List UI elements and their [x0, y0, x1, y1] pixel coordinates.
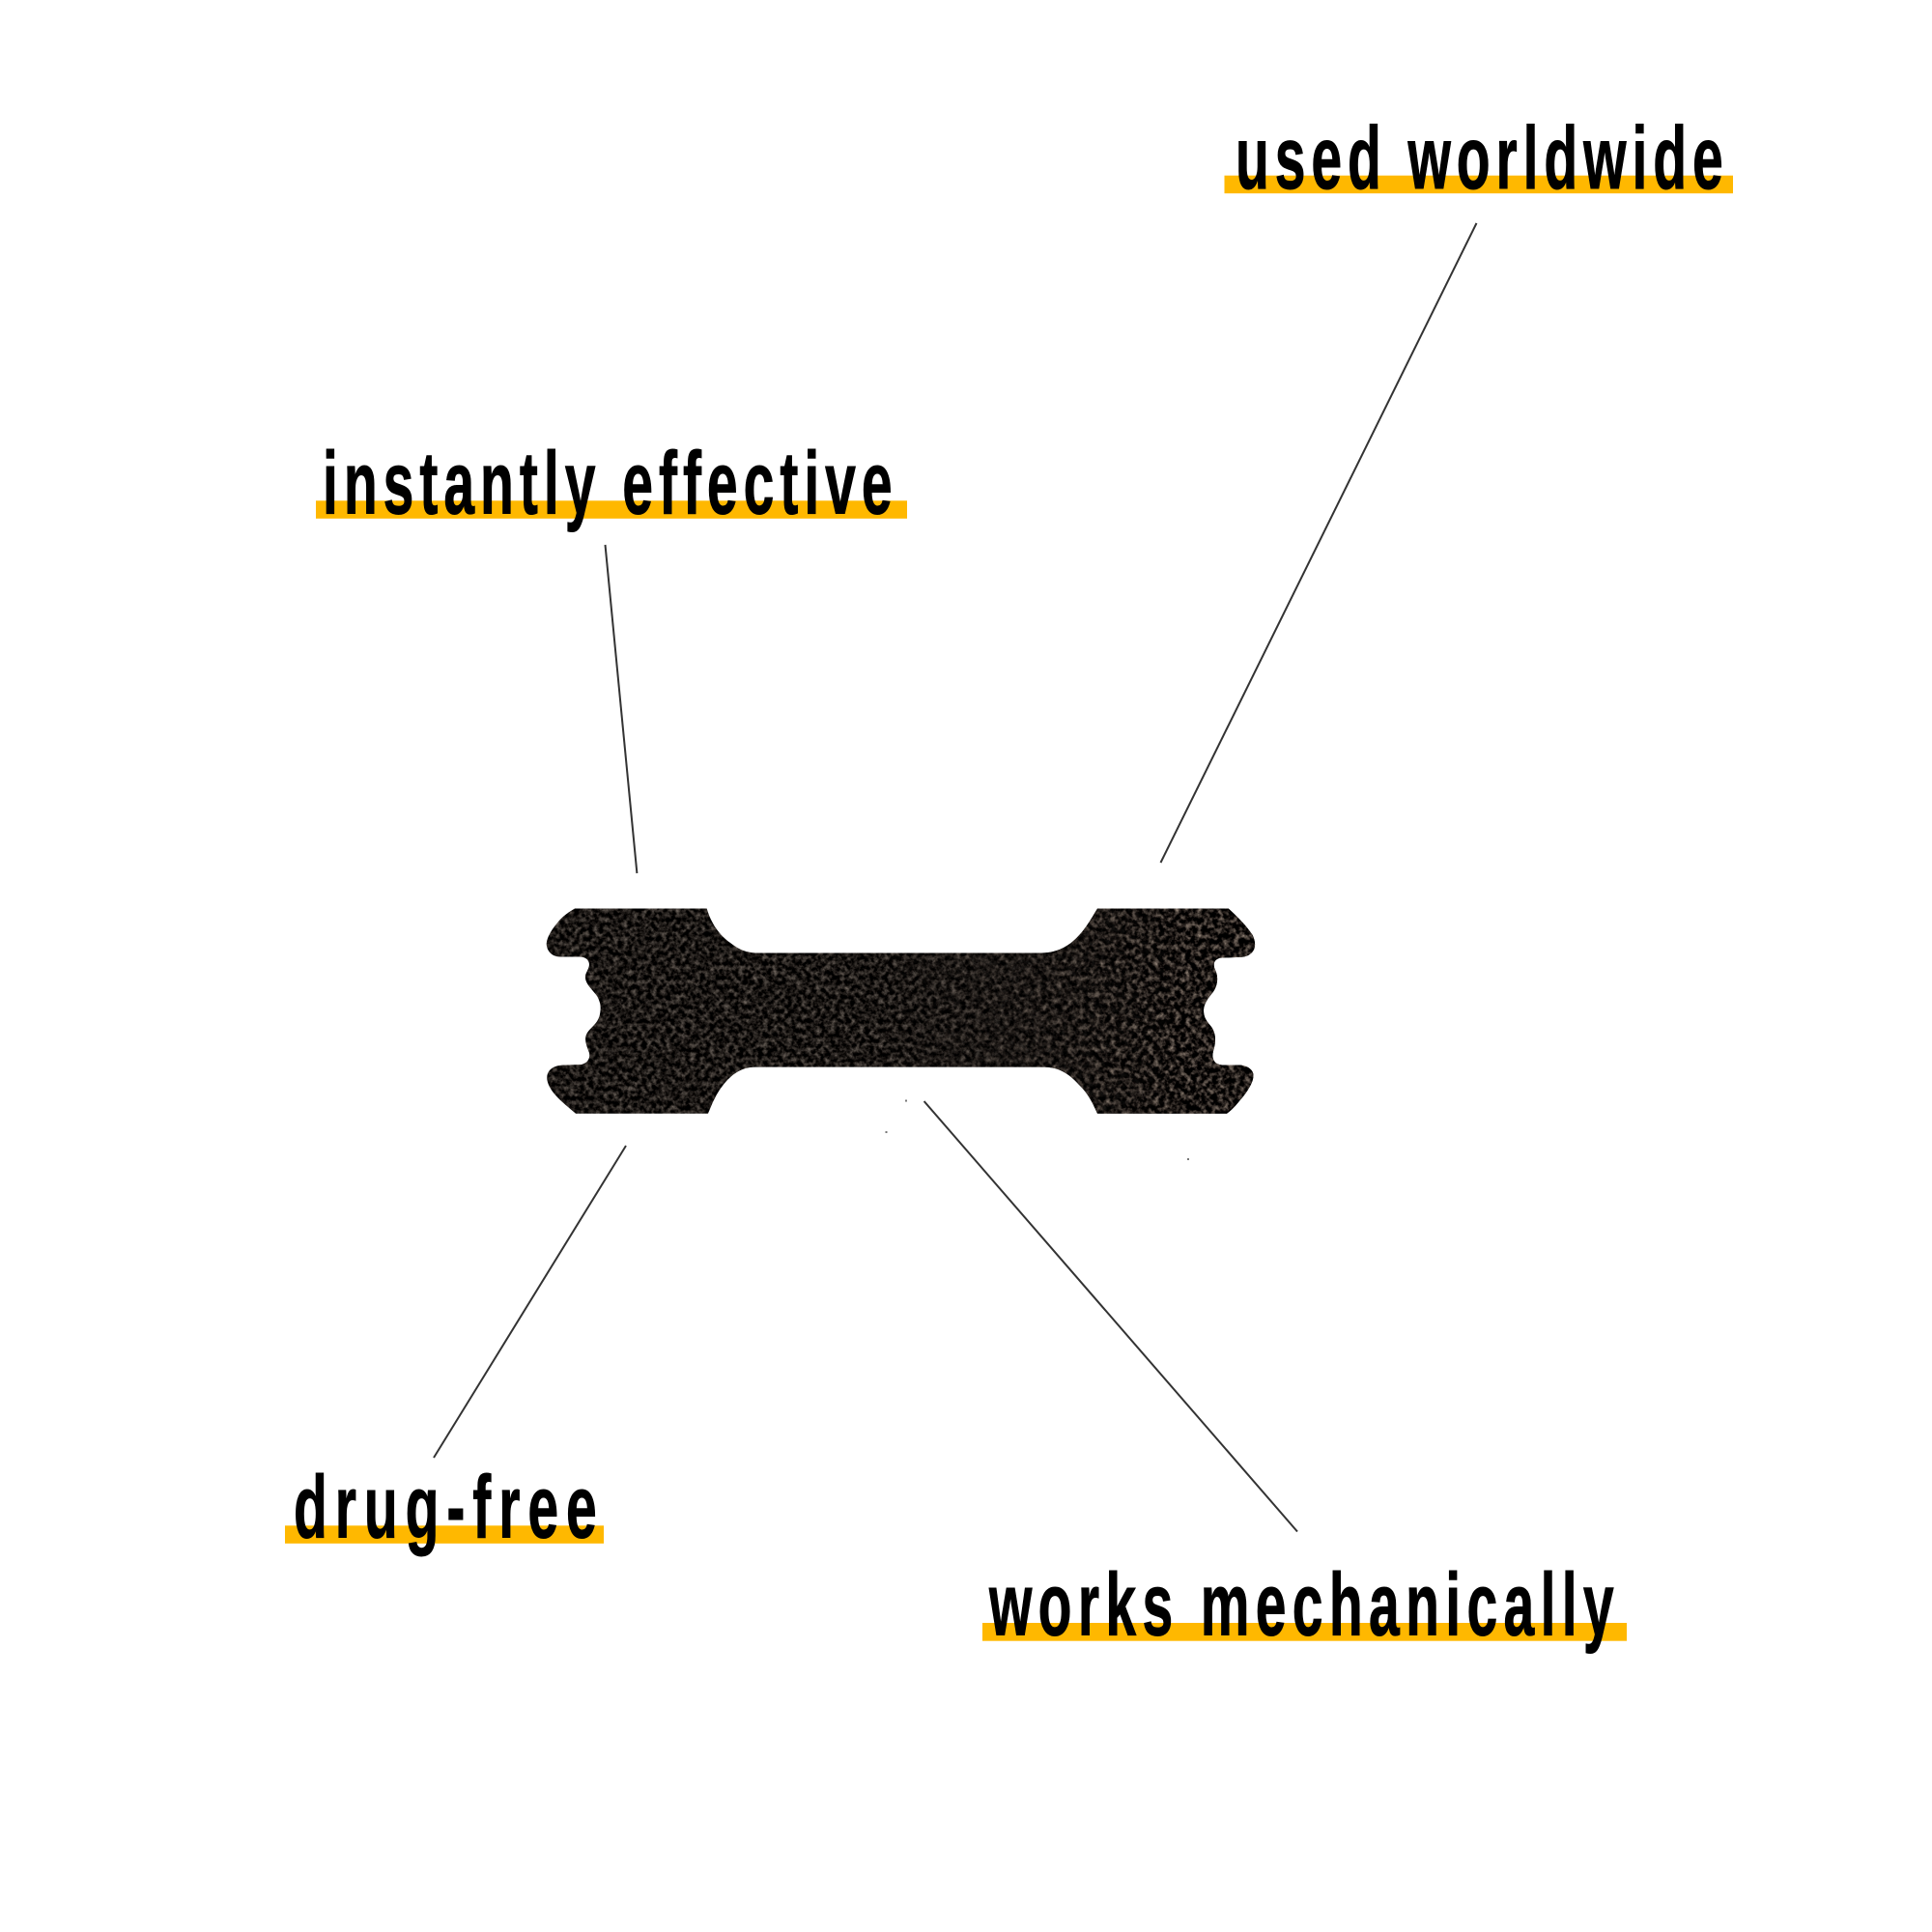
- callout: used worldwide: [1161, 109, 1733, 863]
- dust specks: [885, 1099, 1189, 1160]
- callout: drug-free: [285, 1146, 626, 1557]
- callout: instantly effective: [316, 435, 907, 873]
- label text: instantly effective: [323, 435, 893, 533]
- infographic canvas: [285, 124, 1733, 1654]
- highlight bar: [285, 1525, 604, 1544]
- highlight bar: [982, 1623, 1627, 1641]
- label text: drug-free: [294, 1459, 597, 1557]
- nasal strip product image: [547, 908, 1255, 1114]
- leader line: [605, 545, 637, 873]
- label text: works mechanically: [988, 1556, 1614, 1655]
- highlight bar: [316, 500, 907, 519]
- leader line: [434, 1146, 626, 1458]
- callout: works mechanically: [924, 1101, 1627, 1655]
- leader line: [924, 1101, 1297, 1532]
- label text: used worldwide: [1236, 109, 1723, 208]
- leader line: [1161, 223, 1476, 863]
- highlight bar: [1225, 176, 1733, 193]
